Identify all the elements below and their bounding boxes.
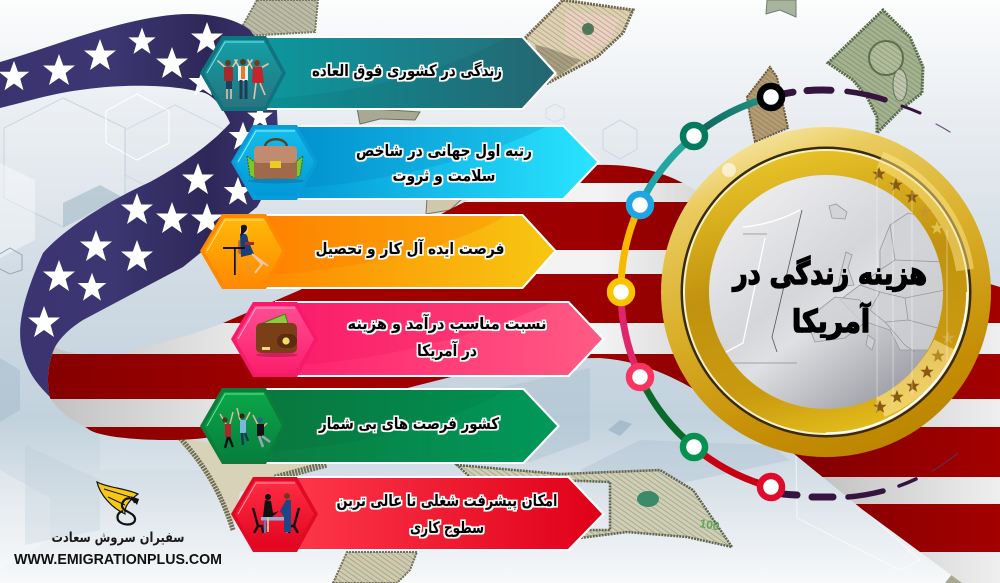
bill: lower right bbox=[457, 465, 732, 547]
bill: top left bbox=[243, 0, 318, 36]
panel: income to cost ratio bbox=[231, 301, 605, 377]
logo bbox=[14, 482, 222, 568]
label: امکان پیشرفت شغلی تا عالی ترین bbox=[336, 491, 558, 511]
icon: woman at table bbox=[223, 225, 268, 275]
icon: business handshake bbox=[253, 493, 299, 533]
bill: bottom centre bbox=[333, 552, 417, 583]
label: فرصت ایده آل کار و تحصیل bbox=[316, 238, 504, 258]
bill: small above red flag bbox=[426, 198, 463, 214]
panel: career advancement to top levels: سطوح کاری bbox=[410, 518, 484, 537]
icon: cheering people bbox=[218, 59, 268, 99]
bill: lower right: 100 bbox=[698, 516, 721, 533]
bill: small under first panel bbox=[357, 108, 420, 124]
coin engraved map and numeral bbox=[713, 204, 945, 363]
bill: small top bbox=[766, 0, 796, 17]
coin title: هزینه زندگی در bbox=[731, 255, 927, 292]
panel: life in a superior country bbox=[200, 36, 557, 111]
bill: bottom right corner bbox=[945, 573, 985, 583]
coin title: آمریکا bbox=[792, 302, 871, 340]
coin title bbox=[731, 255, 927, 340]
arc dashes top bbox=[783, 90, 950, 132]
gold euro coin bbox=[661, 127, 991, 457]
panel: country of countless opportunities bbox=[200, 388, 560, 464]
hexagon badge bbox=[200, 214, 286, 289]
panel: career advancement to top levels bbox=[231, 476, 605, 552]
timeline arc bbox=[621, 90, 958, 497]
logo persian name: سفیران سروش سعادت bbox=[52, 530, 184, 546]
label: نسبت مناسب درآمد و هزینه bbox=[348, 313, 546, 333]
hexagon badge bbox=[200, 36, 286, 111]
stars bbox=[0, 22, 273, 337]
logo icon: winged emblem bbox=[97, 482, 139, 524]
logo website url: WWW.EMIGRATIONPLUS.COM bbox=[14, 551, 222, 568]
label: رتبه اول جهانی در شاخص bbox=[356, 141, 532, 160]
bill: top centre bbox=[525, 0, 633, 83]
arc coloured segments bbox=[694, 97, 771, 136]
label: زندگی در کشوری فوق العاده bbox=[312, 61, 502, 80]
hexagon badge bbox=[231, 302, 318, 377]
hexagon badge bbox=[231, 477, 318, 552]
hexagon badge bbox=[200, 388, 286, 464]
label: کشور فرصت های بی شمار bbox=[318, 414, 500, 433]
blue star ribbon bbox=[0, 14, 278, 397]
panel: income to cost ratio: در آمریکا bbox=[417, 340, 477, 360]
bill: brown behind coin bbox=[747, 67, 788, 142]
timeline nodes bbox=[610, 86, 782, 498]
bill: lower left bbox=[175, 437, 327, 530]
icon: jumping students bbox=[220, 408, 270, 448]
coin stars bbox=[872, 167, 955, 413]
american flag stripes bbox=[48, 164, 1000, 583]
background hexagon pattern bbox=[0, 94, 920, 570]
icon: briefcase with money bbox=[247, 139, 304, 184]
panel: first rank in health and wealth bbox=[231, 125, 600, 200]
panel: first rank in health and wealth: سلامت و ثروت bbox=[392, 166, 496, 185]
hexagon badge bbox=[231, 125, 318, 200]
bill: green behind coin bbox=[828, 10, 923, 133]
icon: wallet bbox=[256, 314, 298, 357]
arc dashes bottom bbox=[783, 453, 958, 497]
coin silver centre bbox=[709, 175, 943, 409]
panel: ideal work and study opportunity bbox=[200, 214, 557, 289]
